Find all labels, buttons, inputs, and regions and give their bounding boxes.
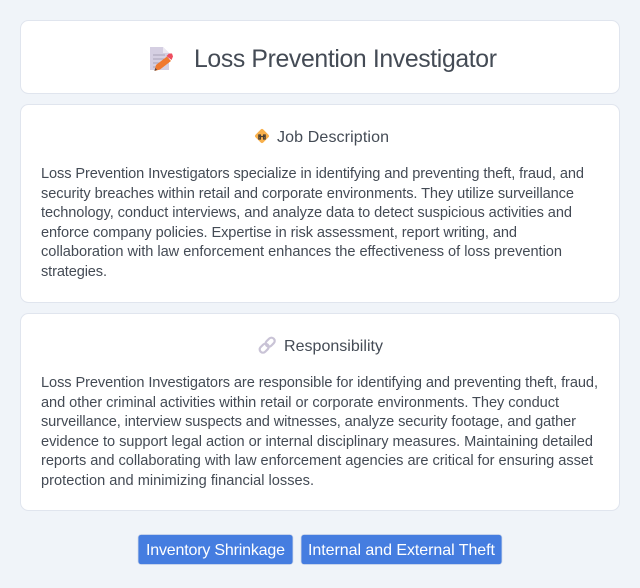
icon: document with pencil (150, 47, 173, 71)
tag: inventory shrinkage: Inventory Shrinkage (146, 542, 285, 559)
icon: construction sign (254, 128, 270, 144)
icon: chain link (258, 336, 276, 354)
panel: responsibility (20, 314, 620, 510)
heading: job description: Job Description (277, 129, 389, 146)
tag: inventory shrinkage (138, 534, 293, 564)
tag: internal and external theft: Internal and External Theft (308, 542, 496, 559)
heading: responsibility: Responsibility (284, 338, 383, 355)
text block: job description: strategies. (41, 264, 107, 280)
text block: job description: collaboration with law enforcement enhances the effectiveness of loss prevention (41, 244, 562, 260)
text block: job description: technology, conduct interviews, and analyze data to detect suspicious activities and (41, 205, 572, 221)
text block: responsibility: reports and collaborating with law enforcement agencies are critical for ensuring asset (41, 453, 593, 469)
text block: job description: security breaches within retail and corporate environments. They utilize surveillance (41, 186, 574, 202)
text block: responsibility: evidence to support legal action or internal disciplinary measures. Maintaining detailed (41, 434, 593, 450)
text block: responsibility (41, 375, 598, 489)
text block: job description: enforce company policies. Expertise in risk assessment, report writing, and (41, 225, 517, 241)
tag: internal and external theft (301, 534, 502, 564)
panel: title header (20, 20, 620, 94)
text block: job description (41, 166, 584, 280)
text block: responsibility: surveillance, interview suspects and witnesses, analyze security footage, and gather (41, 414, 576, 430)
title: Loss Prevention Investigator (194, 46, 497, 73)
text block: responsibility: Loss Prevention Investigators are responsible for identifying and preventing theft, fraud, (41, 375, 598, 391)
text block: responsibility: and other criminal activities within retail or corporate environments. They conduct (41, 395, 559, 411)
text block: responsibility: protection and minimizing financial losses. (41, 473, 314, 489)
text block: job description: Loss Prevention Investigators specialize in identifying and preventing theft, fraud, and (41, 166, 584, 182)
panel: job description (20, 104, 620, 302)
